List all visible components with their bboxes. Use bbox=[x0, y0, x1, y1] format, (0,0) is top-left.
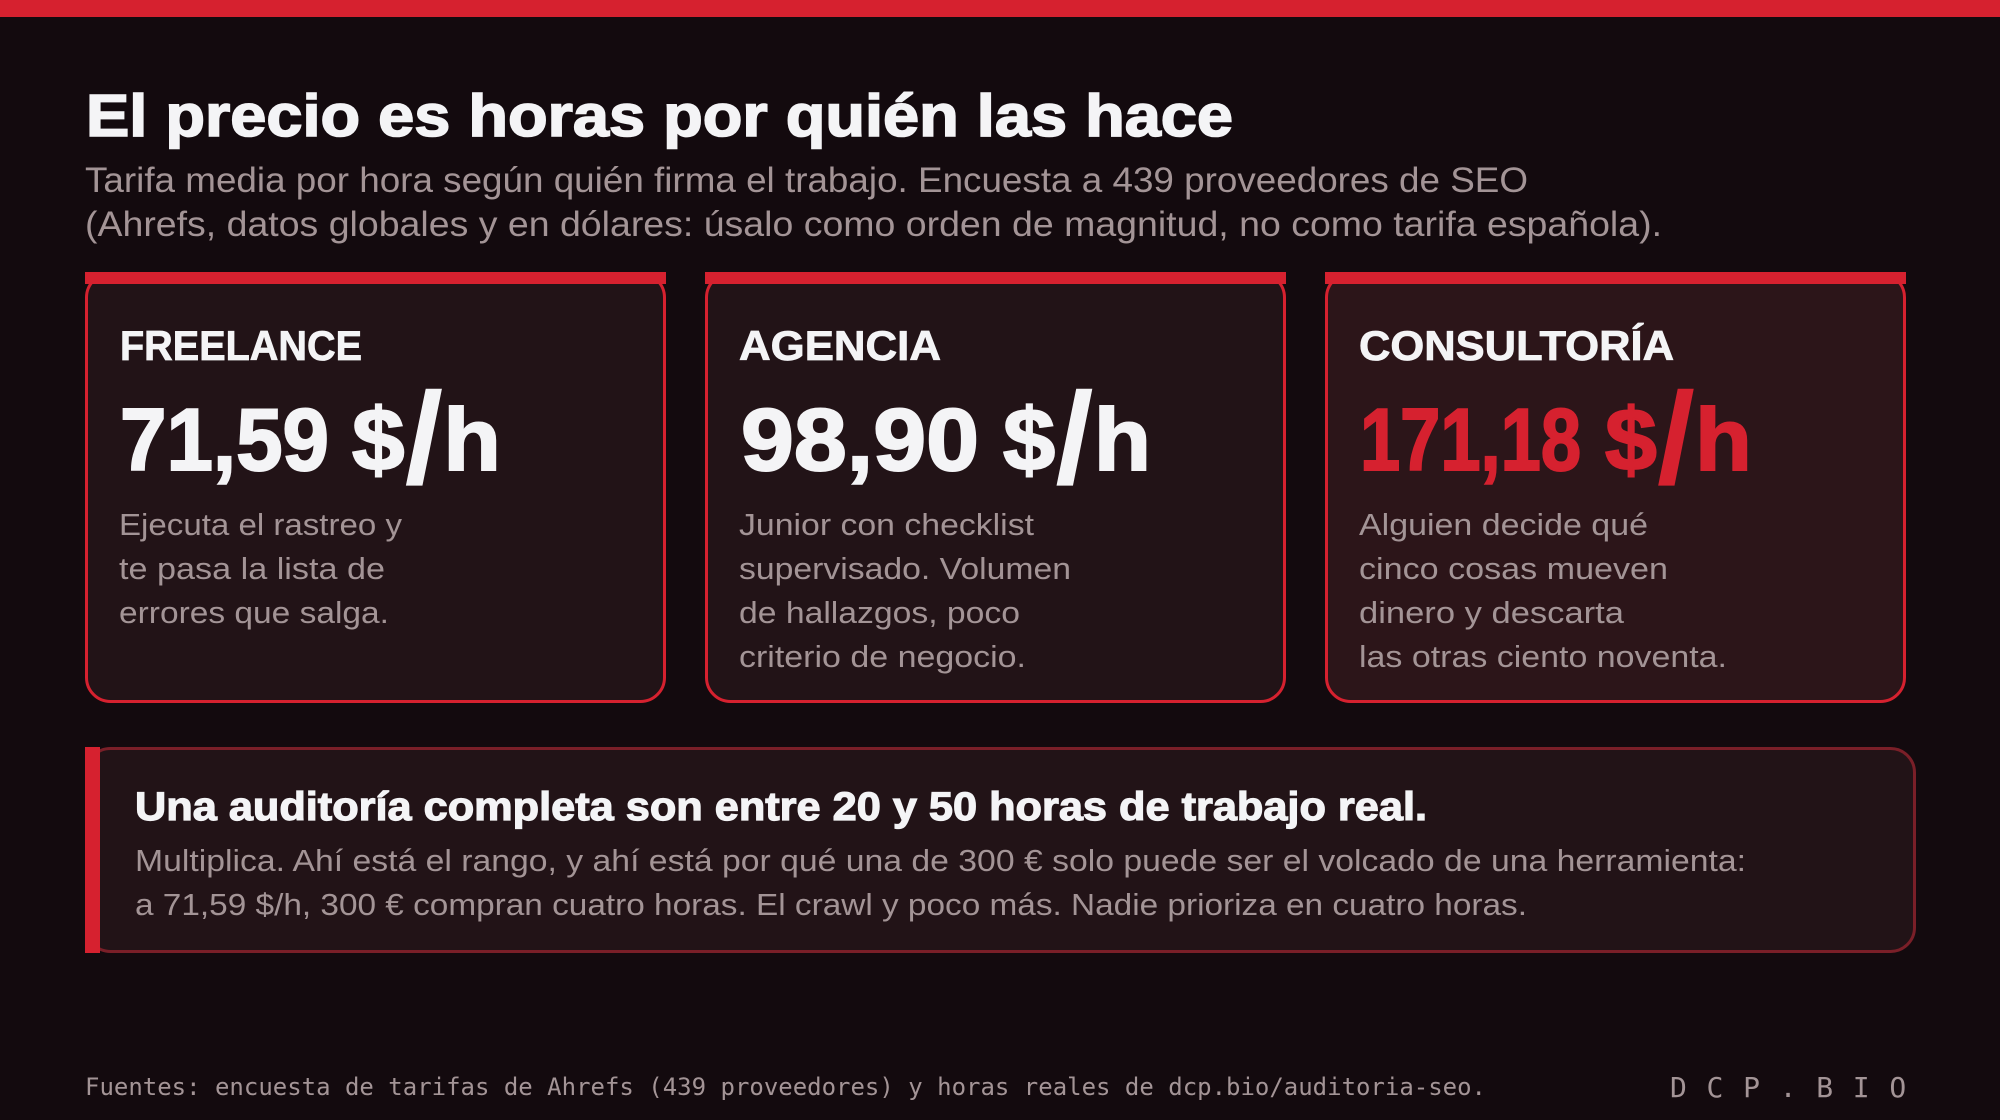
callout body: Multiplica. Ahí está el rango, y ahí está por qué una de 300 € solo puede ser el volcado de una herramienta: bbox=[135, 843, 1746, 878]
value: freelance rate: / bbox=[405, 365, 443, 511]
description: consultoría: las otras ciento noventa. bbox=[1359, 639, 1727, 674]
description: agencia: criterio de negocio. bbox=[739, 639, 1026, 674]
label: freelance: FREELANCE bbox=[120, 322, 362, 369]
description: consultoría: Alguien decide qué bbox=[1359, 507, 1648, 542]
value: agencia rate: h bbox=[1094, 390, 1151, 489]
subtitle: Tarifa media por hora según quién firma el trabajo. Encuesta a 439 proveedores de SEO bbox=[85, 161, 1528, 200]
description: agencia: supervisado. Volumen bbox=[739, 551, 1071, 586]
value: agencia rate: 98,90 bbox=[741, 390, 979, 489]
top accent bar bbox=[0, 0, 2000, 17]
description: agencia: de hallazgos, poco bbox=[739, 595, 1020, 630]
callout body bbox=[135, 843, 1746, 922]
footer source: Fuentes: encuesta de tarifas de Ahrefs (439 proveedores) y horas reales de dcp.bio/auditoria-seo. bbox=[85, 1073, 1486, 1101]
value: consultoría rate bbox=[1360, 365, 1752, 511]
value: agencia rate bbox=[741, 365, 1151, 511]
panel: agencia bbox=[705, 272, 1286, 702]
description: consultoría: dinero y descarta bbox=[1359, 595, 1625, 630]
description: freelance: errores que salga. bbox=[119, 595, 389, 630]
value: consultoría rate: / bbox=[1657, 365, 1695, 511]
description: consultoría: cinco cosas mueven bbox=[1359, 551, 1668, 586]
value: agencia rate: $ bbox=[1003, 390, 1052, 489]
description: freelance bbox=[119, 507, 403, 630]
title: El precio es horas por quién las hace bbox=[86, 83, 1233, 149]
value: consultoría rate: 171,18 bbox=[1360, 390, 1581, 489]
value: agencia rate: / bbox=[1055, 365, 1094, 511]
panel: freelance bbox=[85, 272, 666, 702]
subtitle: (Ahrefs, datos globales y en dólares: úsalo como orden de magnitud, no como tarifa española). bbox=[85, 205, 1662, 244]
value: freelance rate: h bbox=[443, 390, 501, 489]
subtitle bbox=[85, 161, 1662, 244]
callout heading: Una auditoría completa son entre 20 y 50 horas de trabajo real. bbox=[135, 785, 1427, 829]
label: consultoría: CONSULTORÍA bbox=[1359, 322, 1674, 369]
panel: consultoría bbox=[1325, 272, 1906, 702]
value: freelance rate bbox=[120, 365, 501, 511]
callout bbox=[85, 747, 1914, 953]
value: freelance rate: 71,59 bbox=[120, 390, 329, 489]
footer brand: DCP.BIO bbox=[1670, 1071, 1926, 1104]
value: consultoría rate: $ bbox=[1605, 390, 1654, 489]
description: freelance: te pasa la lista de bbox=[119, 551, 385, 586]
callout body: a 71,59 $/h, 300 € compran cuatro horas. El crawl y poco más. Nadie prioriza en cuatro horas. bbox=[135, 887, 1527, 922]
label: agencia: AGENCIA bbox=[739, 322, 941, 369]
description: agencia: Junior con checklist bbox=[739, 507, 1034, 542]
value: freelance rate: $ bbox=[352, 390, 401, 489]
description: agencia bbox=[739, 507, 1071, 674]
description: consultoría bbox=[1359, 507, 1727, 674]
value: consultoría rate: h bbox=[1695, 390, 1752, 489]
description: freelance: Ejecuta el rastreo y bbox=[119, 507, 403, 542]
